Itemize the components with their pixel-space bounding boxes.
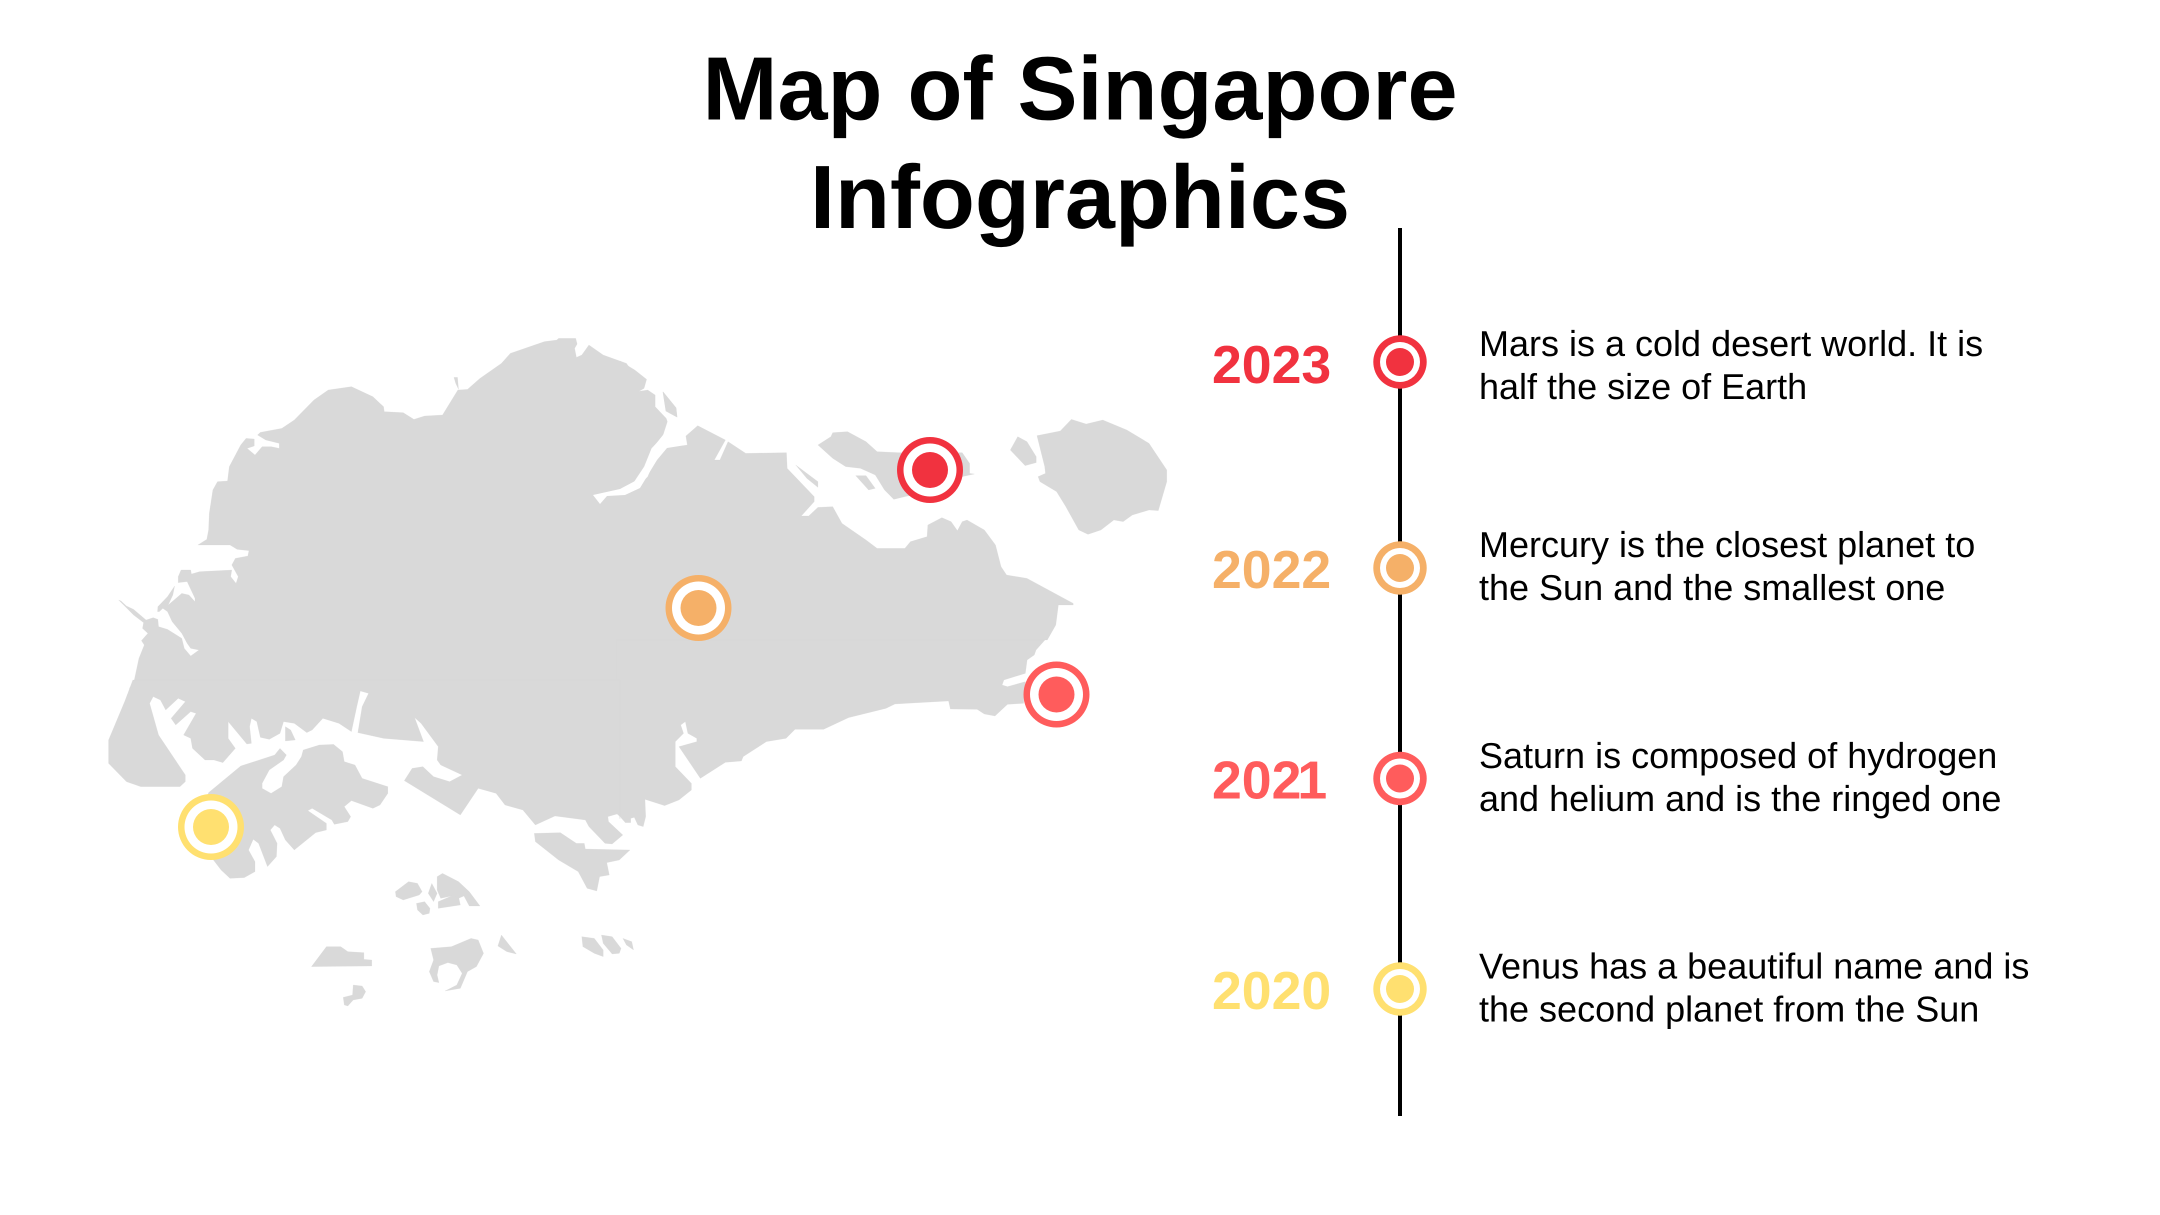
description 2021: and helium and is the ringed one (1479, 778, 2001, 819)
offshore islets and Pulau Ubin (796, 432, 1036, 499)
description 2022: the Sun and the smallest one (1479, 567, 1945, 608)
year 2023: 2023 (1212, 335, 1331, 395)
map marker: orange (666, 575, 732, 641)
description 2021: Saturn is composed of hydrogen (1479, 735, 1997, 776)
year 2020: 2020 (1212, 961, 1331, 1021)
small islet in strait (285, 727, 295, 741)
description 2023 (1479, 323, 1983, 407)
timeline node 2021 (1373, 752, 1427, 805)
year 2021: 2021 (1212, 750, 1327, 810)
main island: north-west (119, 338, 630, 688)
title: Infographics (810, 148, 1350, 248)
Jurong Island (198, 744, 388, 878)
main island: north-east (620, 361, 1167, 640)
timeline axis (1398, 228, 1402, 1116)
description 2020: Venus has a beautiful name and is (1479, 946, 2029, 986)
map marker: coral (1024, 662, 1090, 728)
description 2020: the second planet from the Sun (1479, 988, 1979, 1030)
description 2023: half the size of Earth (1479, 366, 1807, 407)
map of Singapore (109, 338, 1167, 1006)
map marker: red (897, 437, 963, 503)
description 2023: Mars is a cold desert world. It is (1479, 323, 1983, 364)
Seletar inlet (593, 425, 690, 504)
title (702, 40, 1458, 248)
Pulau Tekong (1037, 419, 1167, 534)
timeline node 2023 (1373, 335, 1427, 389)
main island: south-east (616, 640, 1045, 827)
small islet in inlet (663, 392, 677, 417)
description 2021 (1479, 735, 2001, 819)
timeline node 2022 (1373, 541, 1427, 595)
southern islands (311, 873, 634, 1006)
description 2022: Mercury is the closest planet to (1479, 524, 1975, 565)
description 2020 (1479, 946, 2029, 1030)
title: Map of Singapore (702, 40, 1458, 140)
map marker: yellow (178, 794, 244, 860)
description 2022 (1479, 524, 1975, 608)
Sentosa area (534, 833, 630, 891)
timeline node 2020 (1373, 962, 1427, 1016)
main island: south-west and southern islands (109, 680, 634, 1006)
year 2022: 2022 (1212, 540, 1331, 600)
